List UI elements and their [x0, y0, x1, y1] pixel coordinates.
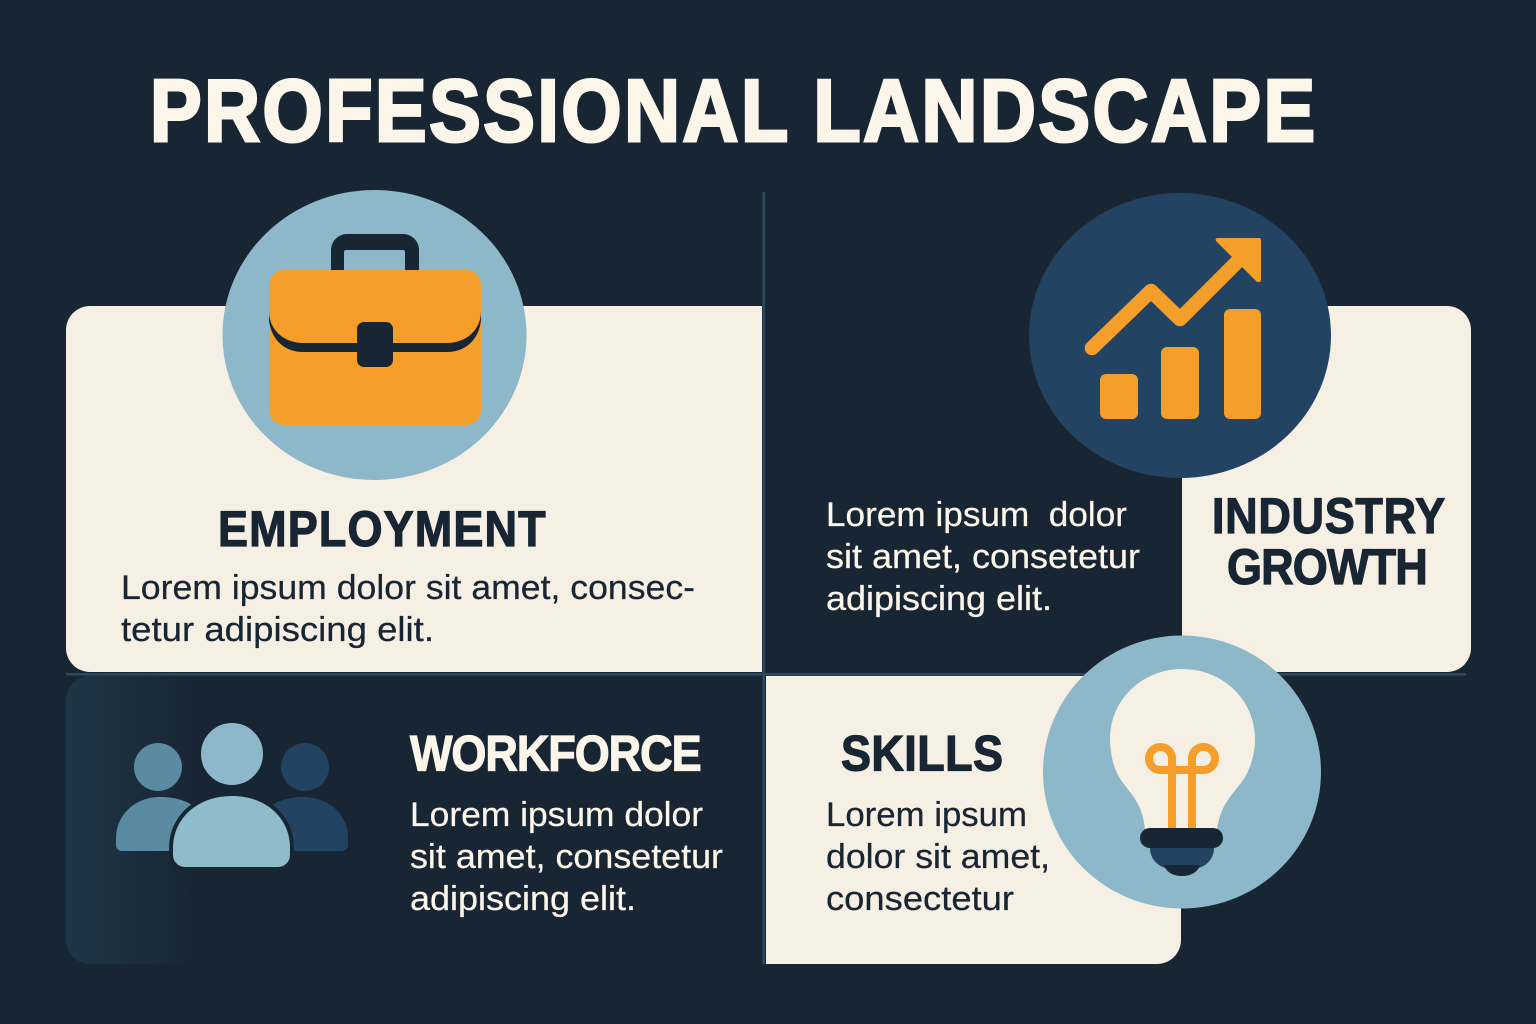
text: skills description: dolor sit amet,: [826, 838, 1050, 876]
text: workforce description: Lorem ipsum dolor: [410, 796, 703, 834]
title: PROFESSIONAL LANDSCAPE: [150, 61, 1315, 160]
panel: skills: [766, 676, 1181, 964]
heading: industry growth: GROWTH: [1227, 540, 1428, 596]
panel: workforce background: [66, 676, 200, 964]
icon: people group: [116, 722, 348, 867]
text: industry growth description: adipiscing elit.: [826, 580, 1052, 618]
text: skills description: Lorem ipsum: [826, 796, 1027, 834]
text: workforce description: [410, 796, 723, 918]
text: industry growth description: Lorem ipsum dolor: [826, 496, 1127, 534]
text: workforce description: sit amet, consetetur: [410, 838, 723, 876]
text: employment description: [121, 569, 695, 649]
text: skills description: consectetur: [826, 880, 1014, 918]
heading: workforce: WORKFORCE: [410, 726, 702, 782]
text: industry growth description: sit amet, consetetur: [826, 538, 1140, 576]
text: employment description: Lorem ipsum dolor sit amet, consec-: [121, 569, 695, 607]
icon: growth chart: [1029, 193, 1331, 478]
heading: industry growth: INDUSTRY: [1212, 489, 1445, 545]
panel: employment: [66, 306, 762, 672]
text: industry growth description: [826, 496, 1140, 618]
text: employment description: tetur adipiscing elit.: [121, 611, 434, 649]
icon: briefcase: [222, 190, 526, 480]
panel: industry growth: [1182, 306, 1471, 672]
icon: light bulb: [1043, 636, 1321, 908]
text: workforce description: adipiscing elit.: [410, 880, 636, 918]
text: skills description: [826, 796, 1050, 918]
heading: industry growth: [1212, 489, 1445, 596]
heading: employment: EMPLOYMENT: [218, 502, 546, 558]
heading: skills: SKILLS: [841, 726, 1003, 782]
